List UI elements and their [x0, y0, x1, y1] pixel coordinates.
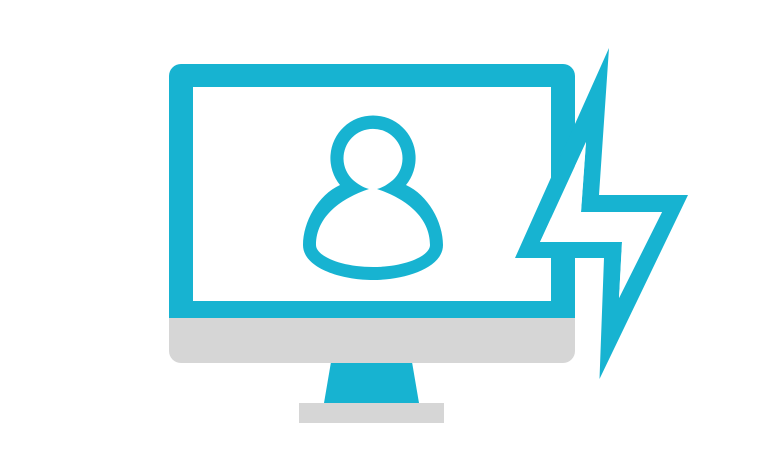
monitor — [169, 64, 575, 423]
monitor base — [299, 403, 444, 423]
icon: lightning bolt — [515, 48, 688, 379]
icon: user — [303, 115, 443, 280]
monitor bezel and screen — [169, 64, 575, 318]
monitor stand — [324, 362, 419, 403]
lightning bolt interior — [540, 142, 662, 298]
monitor chin — [169, 318, 575, 363]
